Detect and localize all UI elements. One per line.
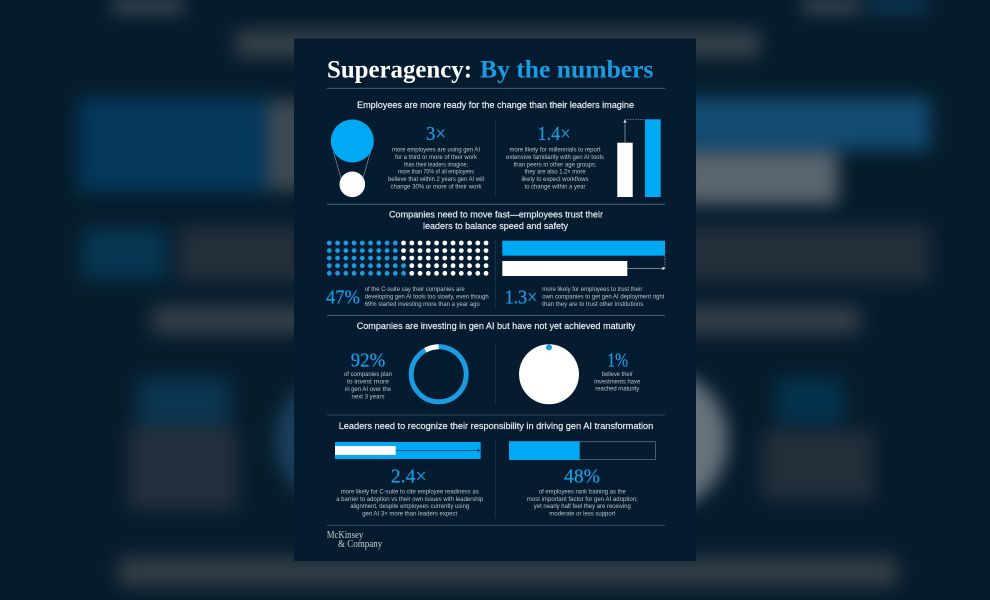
stat: 47% bbox=[326, 286, 489, 309]
title bbox=[327, 56, 654, 84]
heading: move fast bbox=[389, 208, 603, 231]
donut chart: 92% bbox=[411, 347, 466, 402]
stat: 2.4x: alignment, despite employees currently using bbox=[350, 503, 470, 510]
stat: 1.4x: more likely for millennials to report bbox=[510, 146, 601, 154]
stat: 1.4x: 1.4× bbox=[538, 123, 570, 145]
logo: McKinsey & Company: McKinsey bbox=[327, 530, 363, 541]
icon: large and small circles bbox=[331, 120, 374, 197]
stat: 2.4x: more likely for C-suite to cite employee readiness as bbox=[341, 488, 479, 496]
stat: 92%: of companies plan bbox=[344, 371, 392, 378]
bar chart: 2.4x comparison bbox=[335, 442, 481, 459]
title: By the numbers bbox=[480, 56, 654, 84]
bar chart: 48% bbox=[509, 441, 655, 460]
stat: 3x: believe that within 2 years gen AI will bbox=[388, 176, 484, 183]
stat: 48% bbox=[527, 466, 638, 518]
stat: 48%: of employees rank training as the bbox=[539, 488, 626, 496]
stat: 48%: moderate or less support bbox=[549, 510, 616, 518]
heading: employees: Employees are more ready for the change than their leaders imagine bbox=[357, 99, 634, 110]
stat: 1.3x: than they are to trust other institutions bbox=[542, 301, 643, 308]
stat: 3x: change 30% or more of their work bbox=[390, 183, 482, 190]
dot matrix: 47 of 100 bbox=[329, 243, 487, 273]
stat: 1%: 1% bbox=[607, 350, 628, 372]
panel: investing maturity bbox=[344, 320, 641, 405]
stat: 47%: developing gen AI tools too slowly, even though bbox=[365, 293, 489, 300]
stat: 1.3x: 1.3× bbox=[505, 287, 537, 309]
stat: 3x: 3× bbox=[426, 123, 446, 145]
bar chart: 1.3x comparison bbox=[502, 241, 666, 276]
stat: 47%: 47% bbox=[326, 287, 360, 309]
stat: 92%: next 3 years bbox=[352, 393, 384, 400]
stat: 1.4x: to change within a year bbox=[524, 183, 586, 190]
stat: 3x: for a third or more of their work bbox=[395, 154, 478, 161]
panel: employees readiness bbox=[331, 99, 661, 197]
stat: 1% bbox=[594, 350, 641, 393]
stat: 2.4x: a barrier to adoption vs their own issues with leadership bbox=[336, 496, 484, 503]
stat: 1.3x: more likely for employees to trust their bbox=[542, 286, 642, 293]
stat: 1%: reached maturity bbox=[595, 386, 640, 393]
stat: 3x: more than 70% of all employees bbox=[398, 169, 474, 176]
stat: 1.4x: than peers in other age groups; bbox=[514, 161, 597, 168]
stat: 1.3x bbox=[505, 286, 665, 309]
stat: 1%: believe their bbox=[602, 371, 633, 378]
stat: 1.4x: extensive familiarity with gen AI tools bbox=[506, 154, 604, 161]
stat: 47%: 69% started investing more than a year ago bbox=[365, 301, 480, 308]
pie chart: 1% bbox=[519, 344, 579, 404]
logo: McKinsey & Company bbox=[327, 530, 382, 550]
heading: investing: Companies are investing in gen AI but have not yet achieved maturity bbox=[357, 320, 636, 331]
panel: leaders responsibility bbox=[335, 420, 655, 518]
heading: move fast: Companies need to move fast—employees trust their bbox=[389, 208, 603, 219]
heading: move fast: leaders to balance speed and safety bbox=[423, 220, 568, 231]
stat: 3x bbox=[388, 123, 484, 190]
stat: 2.4x: gen AI 3× more than leaders expect bbox=[362, 510, 457, 518]
stat: 2.4x: 2.4× bbox=[391, 466, 427, 488]
stat: 3x: than their leaders imagine; bbox=[404, 161, 468, 168]
stat: 48%: 48% bbox=[564, 466, 600, 488]
panel: move fast bbox=[326, 208, 666, 309]
stat: 3x: more employees are using gen AI bbox=[392, 146, 480, 154]
stat: 1%: investments have bbox=[594, 378, 641, 385]
stat: 1.3x: own companies to get gen AI deployment right bbox=[542, 293, 665, 300]
stat: 47%: of the C-suite say their companies are bbox=[365, 286, 465, 293]
stat: 92% bbox=[344, 350, 392, 400]
stat: 2.4x bbox=[336, 466, 484, 518]
logo: McKinsey & Company: & Company bbox=[338, 539, 382, 550]
stat: 48%: most important factor for gen AI adoption; bbox=[527, 496, 638, 503]
stat: 92%: 92% bbox=[351, 350, 385, 372]
stat: 92%: to invest more bbox=[347, 378, 390, 386]
title: Superagency: bbox=[327, 56, 472, 84]
bar chart: 1.4x comparison bbox=[617, 119, 661, 197]
stat: 1.4x bbox=[506, 123, 604, 190]
heading: leaders: Leaders need to recognize their responsibility in driving gen AI transformation bbox=[339, 420, 653, 431]
stat: 92%: in gen AI over the bbox=[345, 386, 391, 393]
stat: 48%: yet nearly half feel they are receiving bbox=[534, 503, 631, 510]
stat: 1.4x: they are also 1.2× more bbox=[524, 169, 586, 176]
stat: 1.4x: likely to expect workflows bbox=[522, 176, 588, 183]
